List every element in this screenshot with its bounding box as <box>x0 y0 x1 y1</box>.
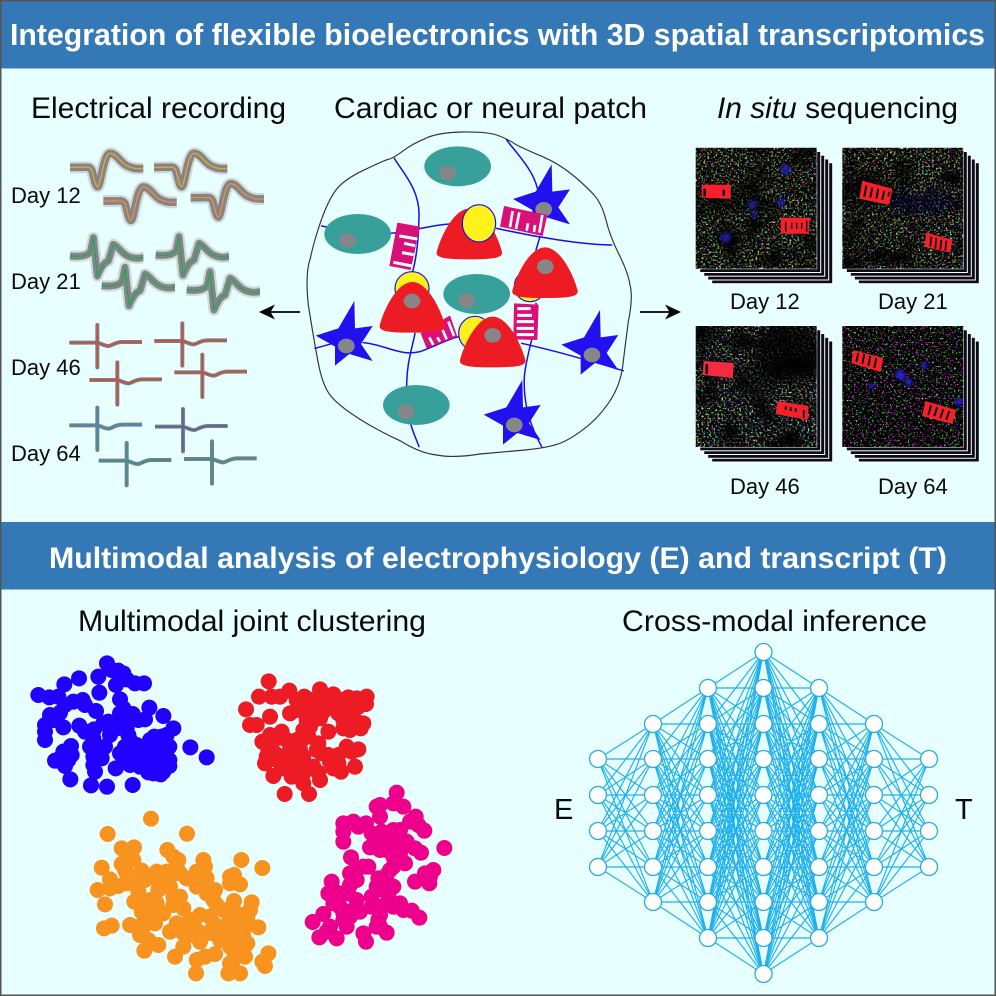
magenta electrode chips <box>389 206 547 348</box>
neural network <box>590 644 938 982</box>
arrow: left <box>259 304 300 320</box>
waveforms: day labels and traces <box>69 153 264 485</box>
heading: cross-modal inference: Cross-modal inference <box>622 605 927 638</box>
image stack day 21 <box>839 148 979 284</box>
heading: multimodal analysis: Multimodal analysis of electrophysiology (E) and transcript (T) <box>49 542 947 575</box>
waveforms day 12 <box>70 153 264 220</box>
image stack day 64 <box>842 326 979 462</box>
panel: cross-modal inference <box>554 605 973 982</box>
neurites <box>315 140 623 447</box>
cluster: blue <box>38 663 207 787</box>
label day 46: Day 46 <box>11 355 81 380</box>
image stack day 46 <box>696 324 833 462</box>
panel: in situ sequencing <box>691 92 979 499</box>
label day 46: Day 46 <box>730 474 800 499</box>
panel: multimodal joint clustering <box>38 605 444 973</box>
label day 64: Day 64 <box>878 474 948 499</box>
label day 21: Day 21 <box>878 289 948 314</box>
cell nuclei <box>404 259 554 343</box>
waveforms day 21 <box>70 237 260 310</box>
waveforms day 46 <box>69 323 247 405</box>
patch outline <box>307 132 631 456</box>
heading: multimodal joint clustering: Multimodal joint clustering <box>78 605 426 638</box>
header band: integration <box>0 1 996 68</box>
heading: integration: Integration of flexible bioelectronics with 3D spatial transcriptomics <box>10 18 985 52</box>
panel: cardiac or neural patch <box>307 92 647 456</box>
network nodes <box>590 644 938 982</box>
image stack day 12 <box>691 148 833 284</box>
heading: in situ sequencing: In situ sequencing <box>717 92 958 125</box>
arrow: right <box>640 304 681 320</box>
label day 12: Day 12 <box>11 183 81 208</box>
heading: electrical recording: Electrical recording <box>31 92 286 125</box>
patch diagram <box>307 132 631 456</box>
header band: multimodal analysis <box>0 522 996 590</box>
blue star neurons <box>316 164 618 445</box>
yellow circle front <box>462 205 496 242</box>
label day 12: Day 12 <box>730 289 800 314</box>
label: T: T <box>955 794 973 826</box>
scatter plot clusters <box>38 663 444 973</box>
cluster: magenta <box>313 793 444 942</box>
red cardiomyocytes <box>380 209 578 367</box>
heading: cardiac or neural patch: Cardiac or neural patch <box>334 92 647 125</box>
network connections <box>598 652 929 974</box>
yellow synapse circles <box>395 270 546 350</box>
cluster: red <box>246 681 367 794</box>
waveforms day 64 <box>69 408 257 485</box>
label day 21: Day 21 <box>11 269 81 294</box>
cluster: orange <box>98 819 268 973</box>
label: E: E <box>554 794 573 826</box>
panel: electrical recording <box>11 92 286 485</box>
label day 64: Day 64 <box>11 441 81 466</box>
teal glial cells <box>324 146 510 425</box>
